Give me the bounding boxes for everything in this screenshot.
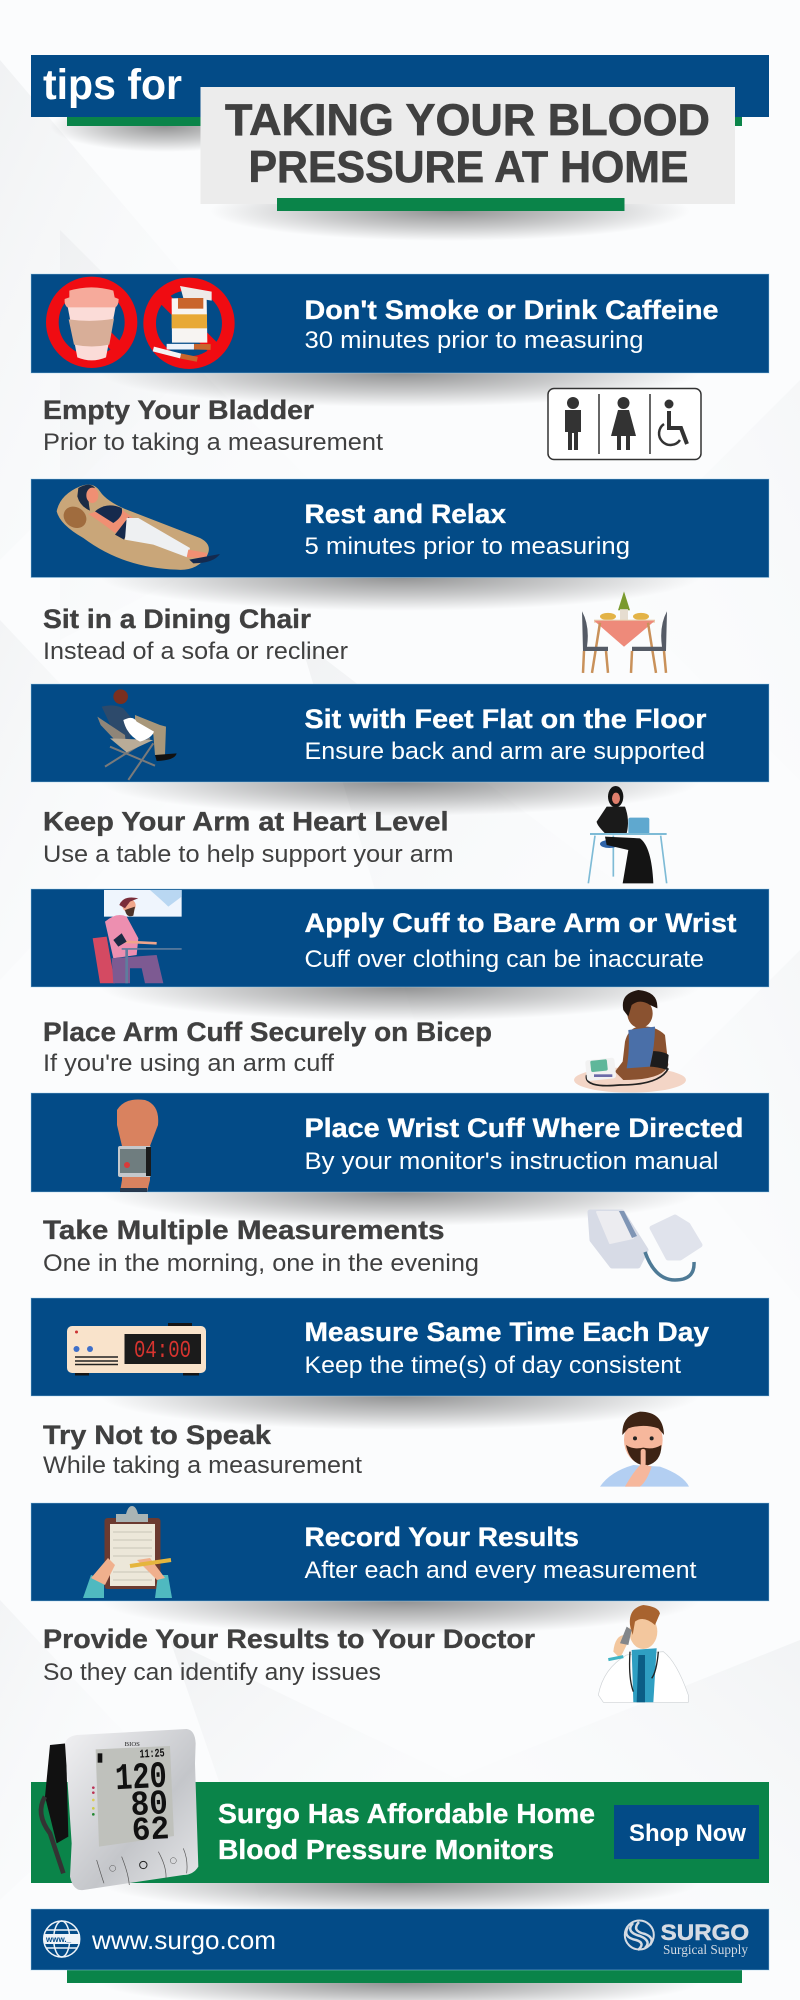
subtext: Prior to taking a measurement: [43, 429, 383, 456]
subtext: So they can identify any issues: [43, 1659, 381, 1686]
icon: woman resting on bean bag: [57, 485, 220, 570]
footer green strip: [67, 1970, 742, 1983]
icon: globe: www._: [45, 1935, 72, 1944]
time reading: 11:25: [139, 1746, 165, 1762]
panel: sit in a dining chair: [43, 591, 667, 673]
shop now button: [614, 1805, 759, 1859]
heading: Keep Your Arm at Heart Level: [43, 806, 448, 836]
subtext: After each and every measurement: [304, 1557, 697, 1584]
panel: empty your bladder: [43, 388, 701, 460]
title card: [200, 87, 735, 211]
heading: Sit in a Dining Chair: [43, 604, 311, 634]
panel: apply cuff to bare arm or wrist: [31, 889, 769, 987]
clock digits: 04:00: [134, 1338, 191, 1365]
icon: blood pressure monitor and cuff: [590, 1211, 700, 1280]
icon: globe: [44, 1921, 80, 1957]
subtext: Instead of a sofa or recliner: [43, 638, 348, 665]
logo: surgo surgical supply: [625, 1920, 749, 1958]
heading: Take Multiple Measurements: [43, 1215, 444, 1245]
heading: Measure Same Time Each Day: [304, 1317, 709, 1347]
subtext: If you're using an arm cuff: [43, 1050, 334, 1077]
icon: restroom sign: [548, 388, 701, 460]
tagline: Surgical Supply: [663, 1943, 748, 1958]
panel: take multiple measurements: [43, 1211, 700, 1280]
panel: provide your results to your doctor: [43, 1605, 688, 1702]
pulse reading: 62: [131, 1811, 170, 1851]
icon: person using arm cuff monitor: [574, 990, 686, 1093]
heading: Rest and Relax: [304, 499, 506, 529]
panel: try not to speak: [43, 1412, 689, 1487]
icon: clipboard with hands: [83, 1506, 172, 1598]
subtext: Use a table to help support your arm: [43, 841, 454, 868]
panel: rest and relax: [31, 479, 769, 578]
subtext: By your monitor's instruction manual: [304, 1148, 718, 1175]
subtext: 30 minutes prior to measuring: [304, 327, 644, 354]
panel: call to action: [31, 1729, 769, 1890]
header blue banner: [31, 55, 769, 117]
heading: Place Wrist Cuff Where Directed: [304, 1113, 744, 1143]
CTA line 1: Surgo Has Affordable Home: [218, 1798, 595, 1829]
panel: don't smoke or drink caffeine: [31, 274, 769, 373]
icon: wrist with cuff: [117, 1099, 158, 1192]
header: tips for taking your blood pressure at home: [31, 55, 769, 211]
heading: Provide Your Results to Your Doctor: [43, 1624, 535, 1654]
shop now button: Shop Now: [629, 1820, 746, 1847]
tips for label: tips for: [43, 61, 182, 109]
subtext: While taking a measurement: [43, 1452, 362, 1479]
subtext: Keep the time(s) of day consistent: [304, 1352, 681, 1379]
icon: no coffee and no cigarettes: [52, 283, 228, 363]
heading: Try Not to Speak: [43, 1420, 271, 1450]
panel: place arm cuff securely on bicep: [43, 990, 686, 1093]
panel: keep your arm at heart level: [43, 786, 667, 883]
subtext: One in the morning, one in the evening: [43, 1250, 479, 1277]
subtext: 5 minutes prior to measuring: [304, 533, 630, 560]
icon: man with arm on table: [93, 890, 182, 983]
diastolic reading: 80: [130, 1784, 169, 1826]
icon: man making shush gesture: [600, 1412, 689, 1487]
panel: place wrist cuff where directed: [31, 1093, 769, 1192]
icon: woman seated at table: [588, 786, 667, 883]
header green strip: [67, 117, 742, 126]
panel: measure same time each day: [31, 1298, 769, 1396]
subtext: Cuff over clothing can be inaccurate: [304, 946, 704, 973]
brand mark: BIOS: [125, 1741, 140, 1748]
title line 1: TAKING YOUR BLOOD: [225, 96, 710, 145]
CTA line 2: Blood Pressure Monitors: [218, 1834, 554, 1865]
wordmark: SURGO: [661, 1920, 749, 1945]
panel: sit with feet flat on the floor: [31, 684, 769, 782]
heading: Place Arm Cuff Securely on Bicep: [43, 1017, 492, 1047]
heading: Don't Smoke or Drink Caffeine: [304, 295, 718, 325]
icon: man seated on chair: [97, 689, 177, 780]
icon: digital clock: [67, 1323, 206, 1376]
heading: Apply Cuff to Bare Arm or Wrist: [304, 908, 737, 938]
heading: Sit with Feet Flat on the Floor: [304, 704, 706, 734]
footer: [31, 1909, 769, 1983]
systolic reading: 120: [114, 1757, 168, 1801]
subtext: Ensure back and arm are supported: [304, 738, 705, 765]
title line 2: PRESSURE AT HOME: [248, 143, 688, 192]
panel: record your results: [31, 1503, 769, 1601]
icon: doctor on the phone: [598, 1605, 688, 1702]
icon: dining table and chairs: [582, 591, 667, 673]
icon: blood pressure monitor device: [41, 1729, 198, 1890]
website url: www.surgo.com: [91, 1925, 276, 1955]
heading: Record Your Results: [304, 1522, 579, 1552]
heading: Empty Your Bladder: [43, 395, 314, 425]
